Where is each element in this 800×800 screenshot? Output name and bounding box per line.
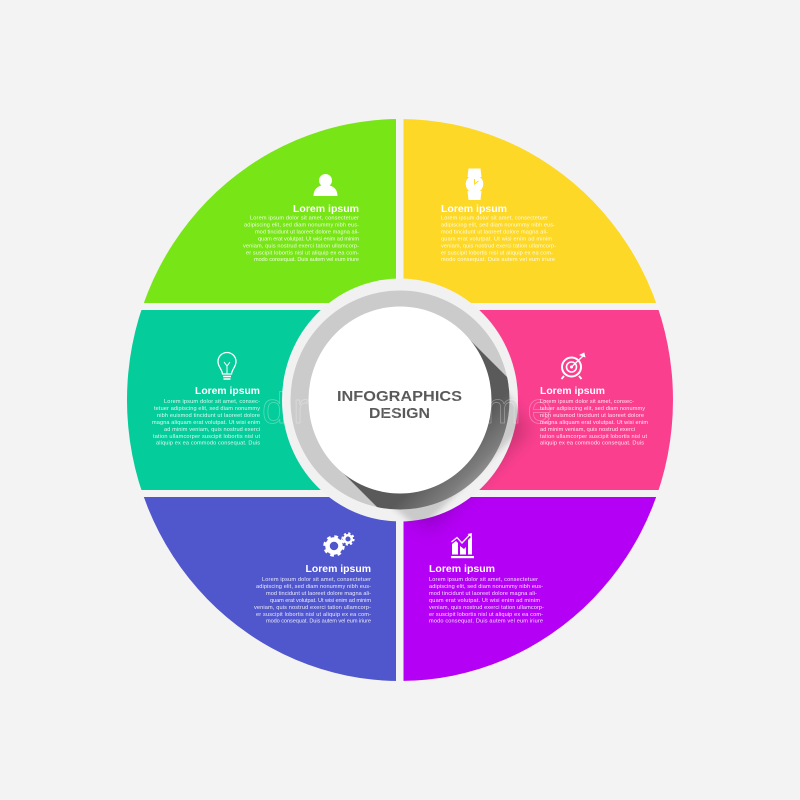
text block: veniam, quis nostrud exerci tation ullamcorp- — [254, 605, 371, 611]
text block: tation ullamcorper suscipit lobortis nisl ut — [153, 434, 260, 440]
icon: gears — [324, 533, 354, 556]
soft shadow on colored segments — [370, 370, 530, 530]
text block: mod tincidunt ut laoreet dolore magna ali- — [266, 591, 371, 597]
panel: pink segment — [479, 310, 673, 490]
panel: purple segment — [404, 497, 656, 681]
text block — [243, 216, 359, 263]
text block: er suscipit lobortis nisl ut aliquip ex ea com- — [429, 612, 543, 618]
text block: veniam, quis nostrud exerci tation ullamcorp- — [441, 243, 556, 249]
yellow content — [441, 168, 556, 263]
text block: Lorem ipsum dolor sit amet, consec- — [540, 399, 634, 405]
text block: modo consequat. Duis autem vel eum iriure — [441, 257, 555, 263]
text block: er suscipit lobortis nisl ut aliquip ex ea com- — [441, 250, 553, 256]
text block: Lorem ipsum dolor sit amet, consectetuer — [262, 577, 371, 583]
text block: nibh euismod tincidunt ut laoreet dolore — [157, 413, 260, 419]
text block: Lorem ipsum dolor sit amet, consectetuer — [250, 216, 359, 222]
text block: tetuer adipiscing elit, sed diam nonummy — [540, 406, 645, 412]
heading: Lorem ipsum — [293, 203, 359, 215]
panel: blue segment — [144, 497, 396, 681]
text block: aliquip ex ea commodo consequat. Duis — [540, 441, 644, 447]
text block: adipiscing elit, sed diam nonummy nibh eus- — [244, 222, 359, 228]
text block: modo consequat. Duis autem vel eum iriure — [266, 619, 371, 625]
text block: mod tincidunt ut laoreet dolore magna ali- — [429, 591, 537, 597]
text block: quam erat volutpat. Ut wisi enim ad minim — [441, 236, 552, 242]
text block: aliquip ex ea commodo consequat. Duis — [156, 441, 260, 447]
text block: adipiscing elit, sed diam nonummy nibh eus- — [256, 584, 371, 590]
heading: Lorem ipsum — [441, 203, 507, 215]
gaps over soft shadow — [396, 490, 560, 540]
text block: modo consequat. Duis autem vel eum iriure — [254, 257, 359, 263]
text block: magna aliquam erat volutpat. Ut wisi enim — [152, 420, 260, 426]
text block: er suscipit lobortis nisl ut aliquip ex ea com- — [256, 612, 371, 618]
text block — [429, 577, 544, 625]
text block: adipiscing elit, sed diam nonummy nibh eus- — [441, 222, 555, 228]
text block: quam erat volutpat. Ut wisi enim ad minim — [258, 236, 359, 242]
text block: mod tincidunt ut laoreet dolore magna ali- — [255, 229, 359, 235]
heading: Lorem ipsum — [429, 563, 495, 575]
icon: light bulb — [218, 352, 236, 379]
text block: ad minim veniam, quis nostrud exerci — [540, 427, 635, 433]
text block: ad minim veniam, quis nostrud exerci — [164, 427, 260, 433]
text block: magna aliquam erat volutpat. Ut wisi enim — [540, 420, 648, 426]
icon: watch — [466, 168, 483, 200]
panel: yellow segment — [404, 119, 656, 303]
center light ring — [282, 278, 518, 522]
text block: veniam, quis nostrud exerci tation ullamcorp- — [429, 605, 544, 611]
center grey ring — [290, 290, 510, 510]
center title — [337, 388, 462, 422]
icon: target — [562, 353, 585, 379]
text block: quam erat volutpat. Ut wisi enim ad minim — [270, 598, 371, 604]
heading: Lorem ipsum — [540, 385, 605, 397]
watermark: dreamstime — [262, 384, 552, 433]
heading: Lorem ipsum — [306, 563, 371, 575]
panel: green segment — [144, 119, 396, 303]
text block: er suscipit lobortis nisl ut aliquip ex ea com- — [246, 250, 359, 256]
teal content — [152, 352, 260, 447]
center title: DESIGN — [369, 405, 430, 422]
center title: INFOGRAPHICS — [337, 388, 462, 405]
green content — [243, 174, 359, 263]
text block: mod tincidunt ut laoreet dolore magna ali- — [441, 229, 548, 235]
text block: tation ullamcorper suscipit lobortis nisl ut — [540, 434, 647, 440]
text block: Lorem ipsum dolor sit amet, consec- — [164, 399, 260, 405]
heading: Lorem ipsum — [195, 385, 260, 397]
text block — [152, 399, 260, 447]
pink content — [540, 353, 648, 447]
panel: teal segment — [127, 310, 321, 490]
center white circle — [308, 306, 492, 494]
icon: bar chart with arrow — [451, 533, 474, 558]
text block: modo consequat. Duis autem vel eum iriure — [429, 619, 543, 625]
text block: tetuer adipiscing elit, sed diam nonummy — [154, 406, 260, 412]
purple content — [429, 533, 544, 625]
text block — [254, 577, 371, 625]
text block: veniam, quis nostrud exerci tation ullamcorp- — [243, 243, 359, 249]
text block: nibh euismod tincidunt ut laoreet dolore — [540, 413, 644, 419]
text block: Lorem ipsum dolor sit amet, consectetuer — [429, 577, 538, 583]
text block — [441, 216, 556, 263]
text block: Lorem ipsum dolor sit amet, consectetuer — [441, 216, 548, 222]
text block: adipiscing elit, sed diam nonummy nibh eus- — [429, 584, 543, 590]
text block: quam erat volutpat. Ut wisi enim ad minim — [429, 598, 540, 604]
text block — [540, 399, 648, 447]
soft shadow on light ring — [393, 393, 518, 521]
icon: person — [314, 174, 338, 196]
long shadow in ring — [342, 340, 510, 510]
blue content — [254, 533, 371, 625]
